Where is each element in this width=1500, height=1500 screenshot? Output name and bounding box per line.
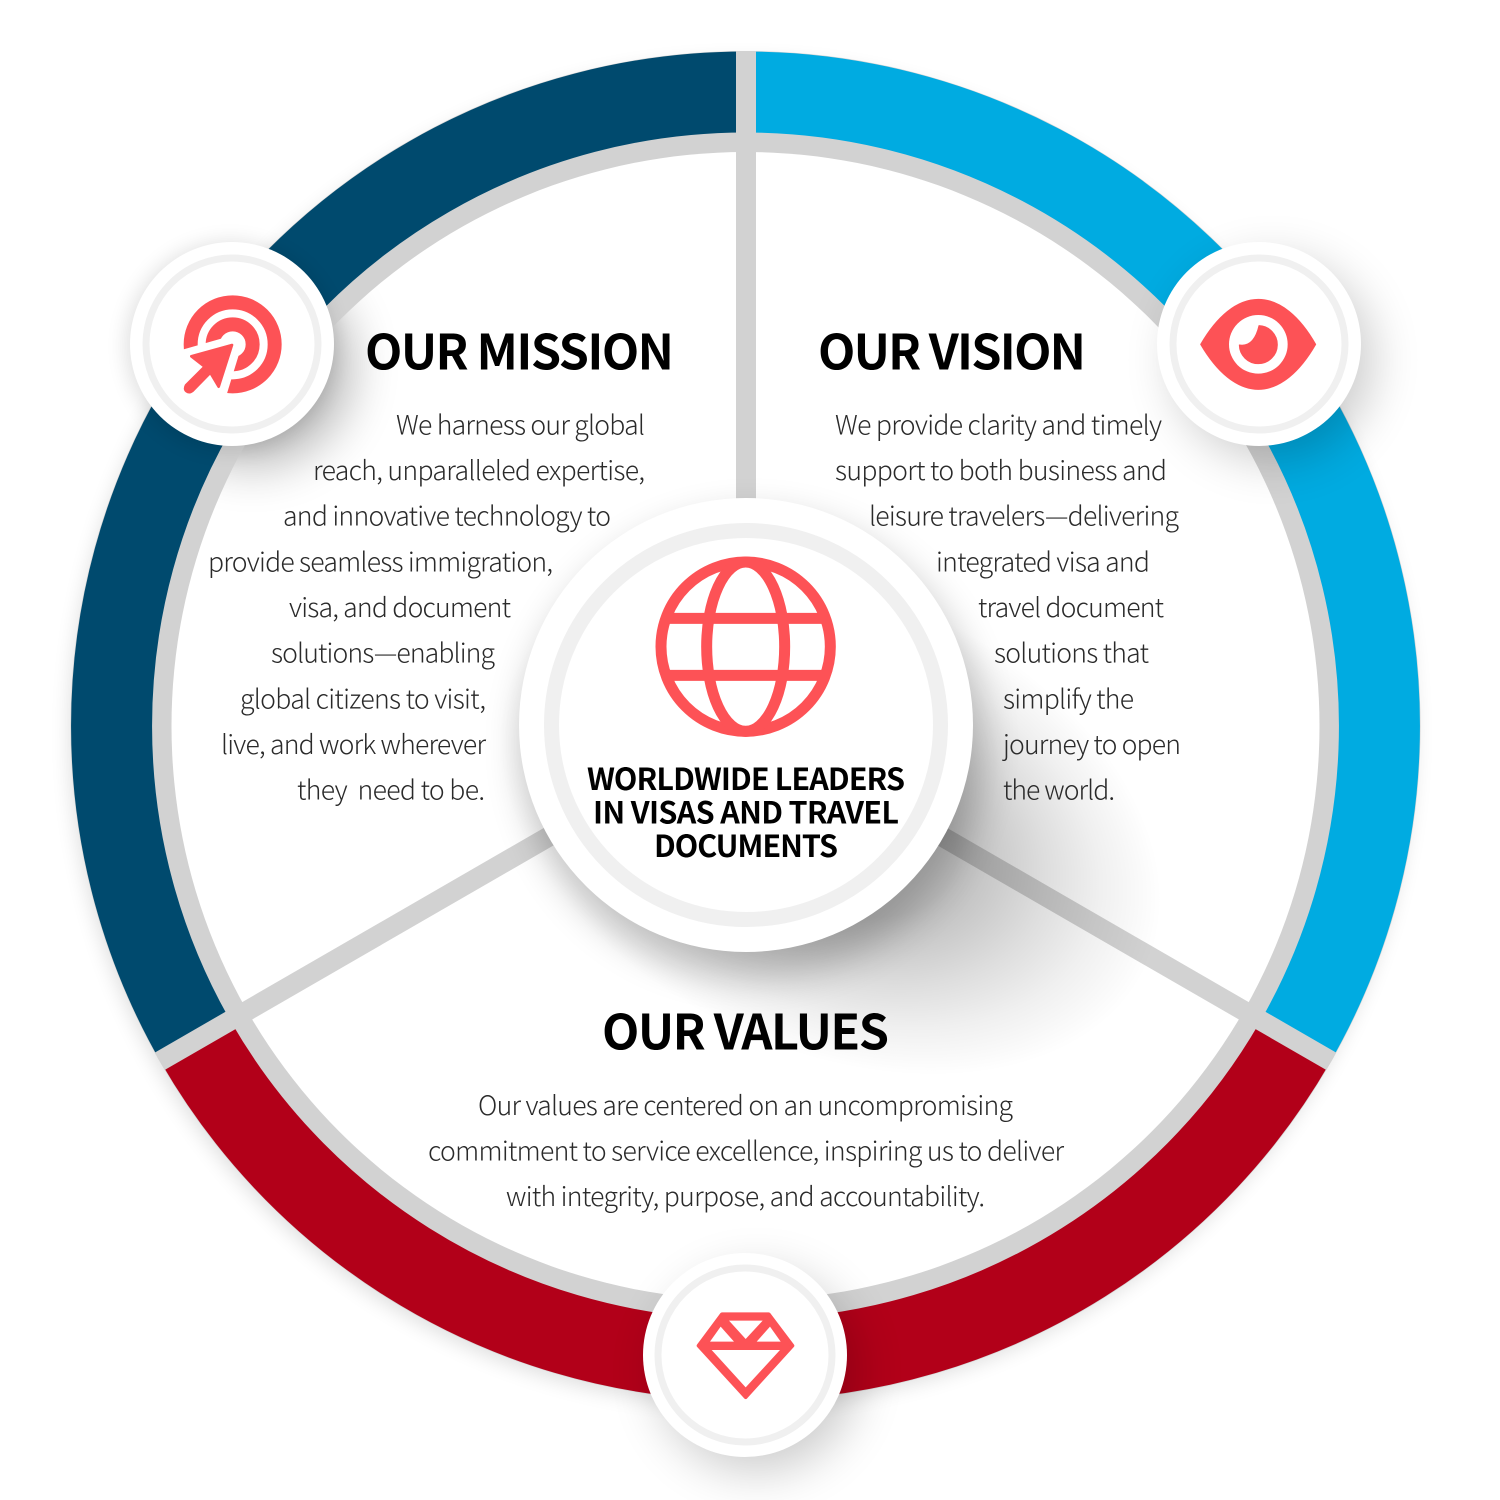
panel: our vision — [818, 314, 1181, 807]
text block: vision statement: travel document — [978, 586, 1165, 625]
text block: vision statement: support to both business and — [835, 449, 1167, 488]
icon badge: gem — [643, 1253, 847, 1457]
icon: gem — [699, 1314, 792, 1397]
panel: our values — [428, 994, 1064, 1214]
text block: mission statement: reach, unparalleled expertise, — [313, 449, 645, 488]
spokes dividing the three panels — [136, 30, 1355, 1075]
text block: values statement: with integrity, purpose, and accountability. — [506, 1175, 985, 1214]
panel: our mission — [208, 314, 674, 807]
text block: mission statement — [208, 404, 645, 807]
icon: eye — [1201, 299, 1316, 389]
icon badge: target — [130, 242, 334, 446]
text block: vision statement: journey to open — [1002, 723, 1181, 762]
text block: mission statement: global citizens to visit, — [240, 677, 486, 716]
hub caption: IN VISAS AND TRAVEL — [593, 788, 899, 832]
heading: our values: OUR VALUES — [602, 994, 889, 1064]
text block: mission statement: provide seamless immigration, — [208, 540, 553, 579]
text block: mission statement: solutions—enabling — [271, 631, 496, 670]
text block: vision statement: leisure travelers—delivering — [869, 494, 1180, 533]
text block: mission statement: and innovative technology to — [283, 494, 611, 533]
text block: mission statement: We harness our global — [396, 404, 645, 442]
icon: target with arrow cursor — [180, 302, 275, 400]
text block: mission statement: they need to be. — [297, 768, 485, 807]
text block: mission statement: live, and work wherever — [221, 723, 486, 762]
text block: mission statement: visa, and document — [289, 586, 512, 625]
segment: mission (navy) — [112, 92, 746, 1043]
text block: vision statement: simplify the — [1003, 677, 1134, 716]
text block: vision statement — [835, 404, 1181, 807]
central hub — [519, 498, 973, 952]
text block: values statement: Our values are centered on an uncompromising — [478, 1084, 1014, 1123]
text block: vision statement: the world. — [1003, 768, 1115, 807]
text block: vision statement: integrated visa and — [936, 540, 1150, 579]
hub caption: WORLDWIDE LEADERS — [587, 755, 905, 799]
icon: globe — [661, 562, 830, 731]
heading: our mission: OUR MISSION — [365, 314, 674, 384]
text block: vision statement: We provide clarity and timely — [835, 404, 1162, 442]
text block: vision statement: solutions that — [994, 631, 1150, 670]
icon badge: eye — [1157, 242, 1361, 446]
hub caption — [587, 755, 905, 866]
segment: values (red) — [196, 1043, 1294, 1360]
text block: values statement: commitment to service excellence, inspiring us to deliver — [428, 1129, 1064, 1168]
heading: our vision: OUR VISION — [818, 314, 1086, 384]
hub caption: DOCUMENTS — [654, 822, 838, 866]
text block: values statement — [428, 1084, 1064, 1214]
segment: vision (blue) — [746, 92, 1379, 1043]
